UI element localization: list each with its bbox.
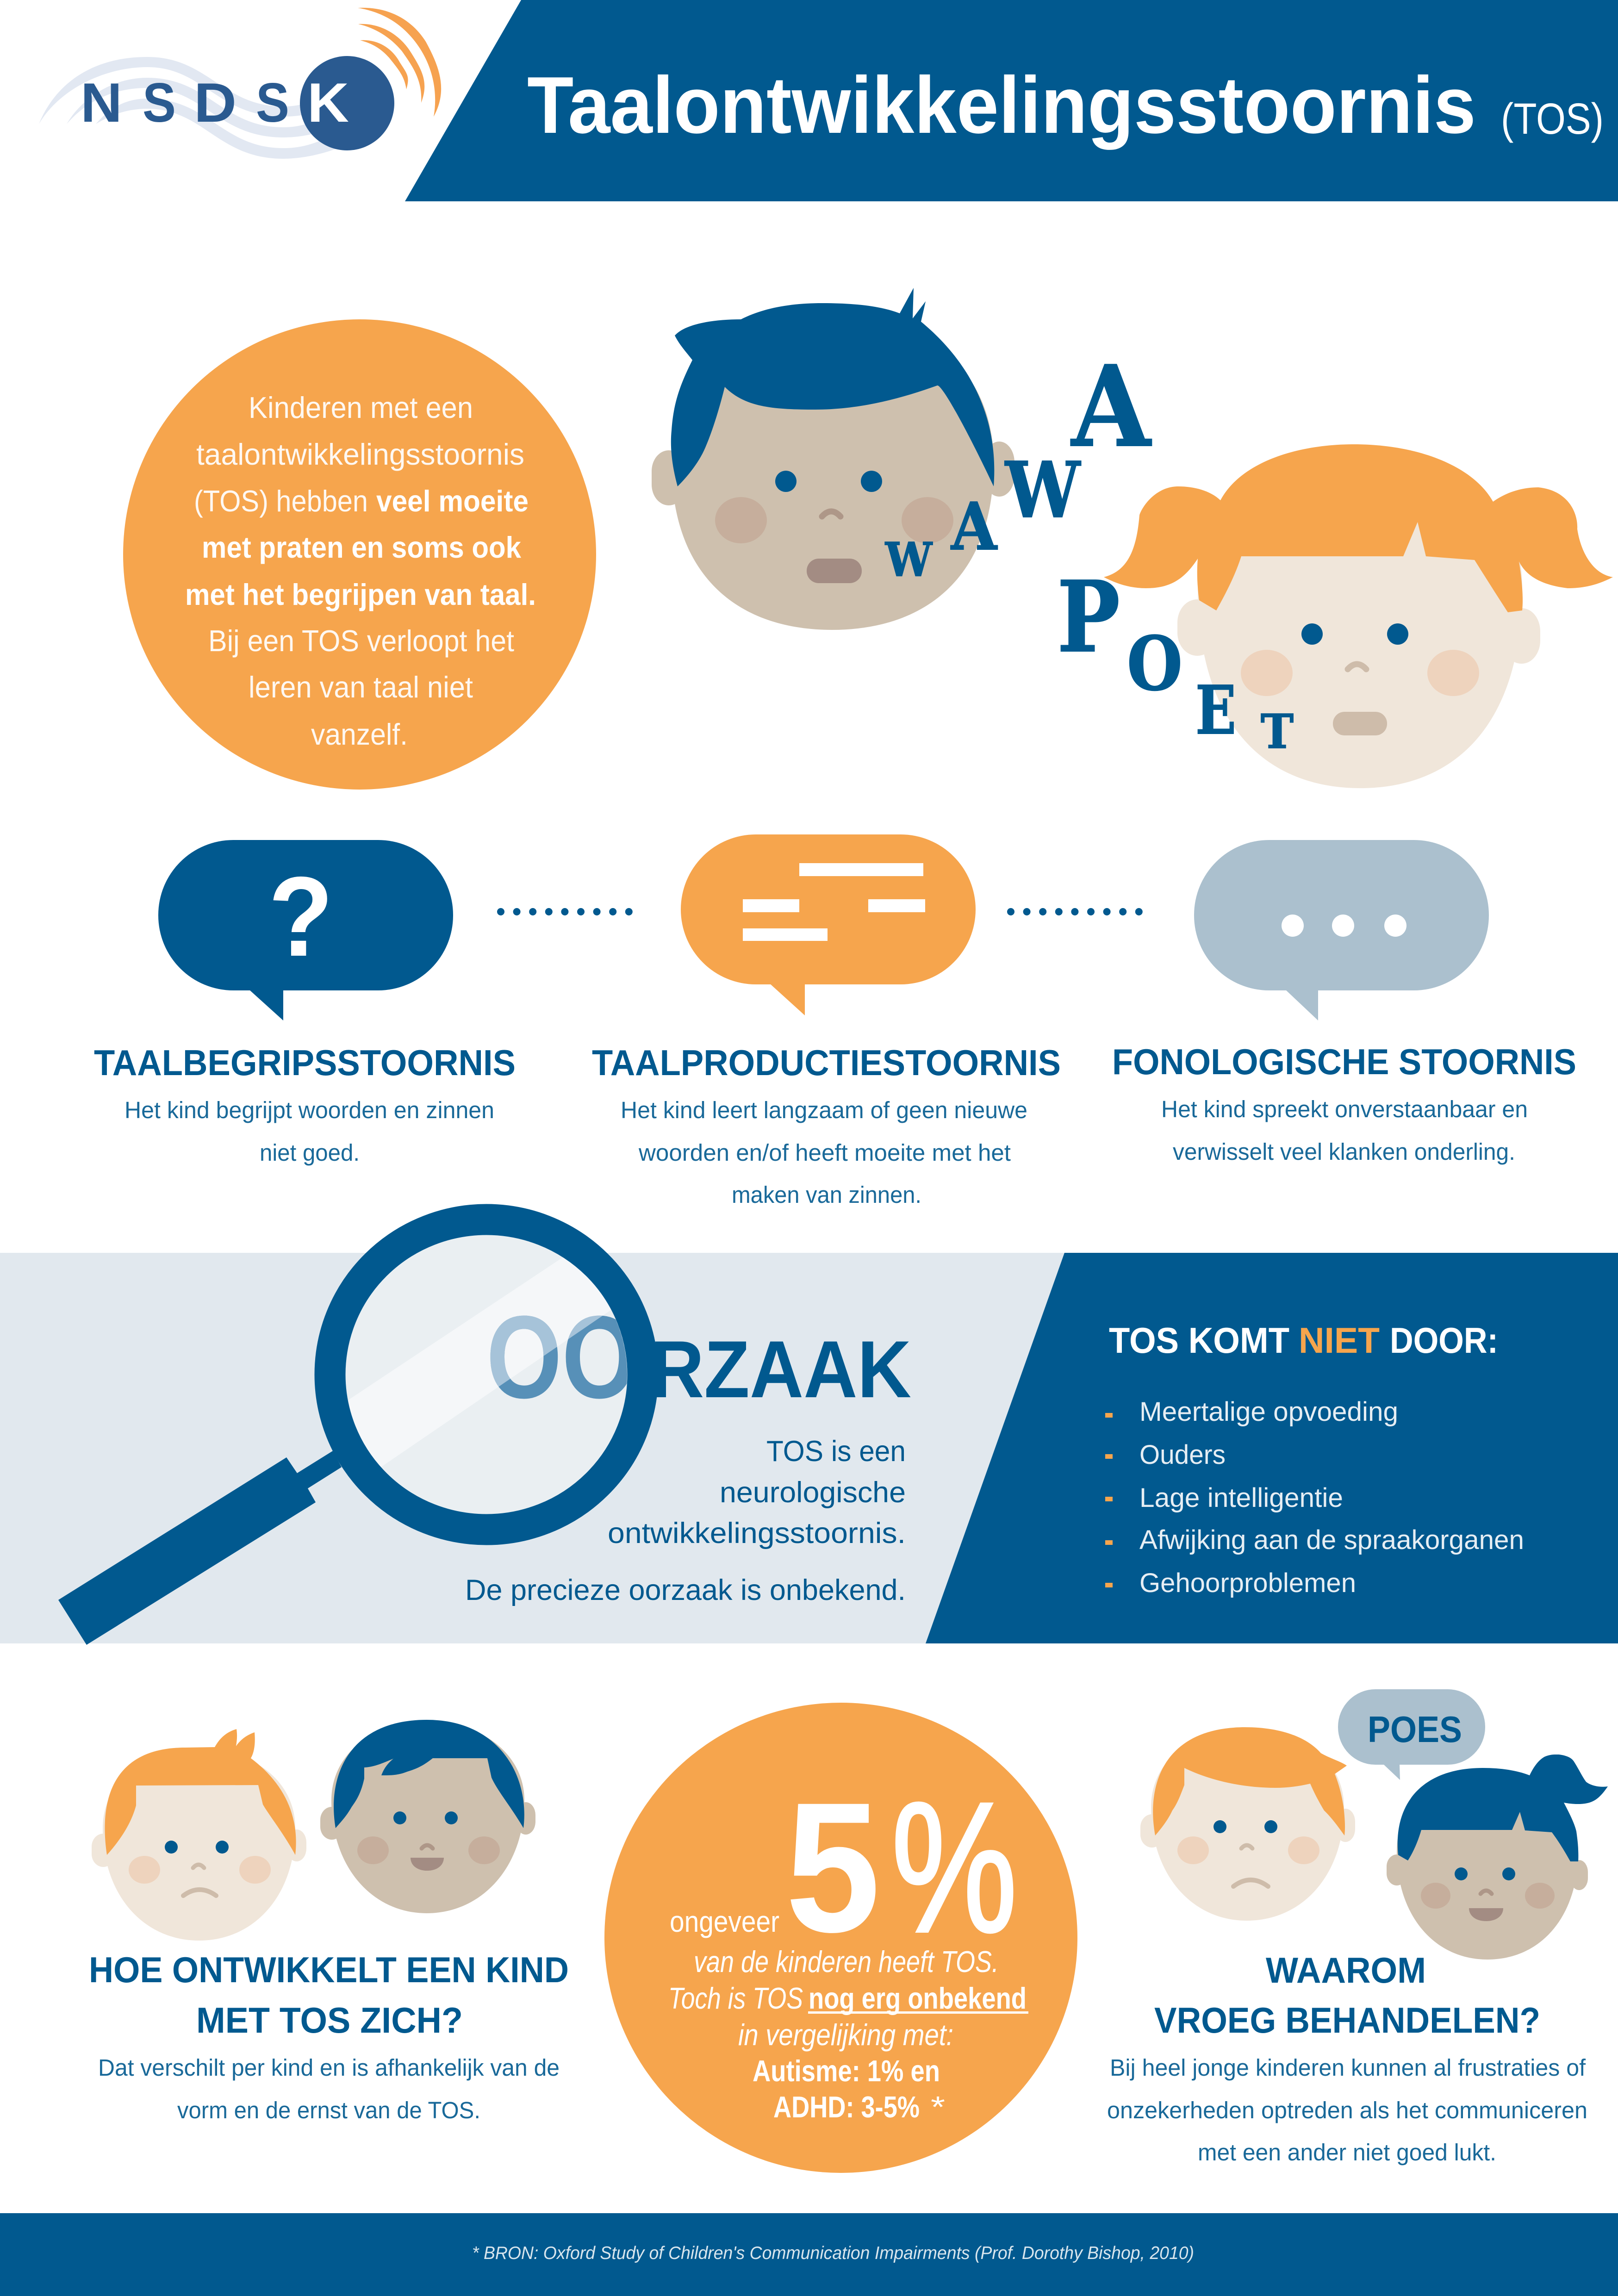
letters: AWAW — [885, 341, 1152, 587]
text: oorzaak explanation: neurologische — [720, 1476, 906, 1509]
text block: hoe ontwikkelt — [89, 1949, 569, 2123]
stat text: in vergelijking met: — [738, 2018, 953, 2052]
panel: oorzaak background — [0, 1253, 1111, 1643]
text block: hoe ontwikkelt: MET TOS ZICH? — [196, 2000, 463, 2041]
intro text: veel moeite — [376, 484, 529, 518]
text block: taalproductiestoornis — [592, 1042, 1061, 1208]
speech bubble: text lines — [681, 834, 976, 1015]
logo letters: K — [307, 72, 349, 134]
text block: taalproductiestoornis: maken van zinnen. — [732, 1182, 921, 1208]
list: not caused by: Afwijking aan de spraakorganen — [1139, 1525, 1524, 1555]
logo sound arcs — [358, 8, 441, 117]
panel: 5 percent circle — [604, 1703, 1077, 2173]
text block: waarom vroeg behandelen: WAAROM — [1266, 1950, 1426, 1991]
text block: taalproductiestoornis: TAALPRODUCTIESTOORNIS — [592, 1042, 1061, 1083]
speech bubble: ellipsis — [1194, 840, 1489, 1020]
speech bubble: POES — [1338, 1689, 1485, 1780]
list: not caused by: Gehoorproblemen — [1139, 1568, 1356, 1598]
list: not caused by: Lage intelligentie — [1139, 1483, 1343, 1513]
letters: POET: P — [1057, 560, 1120, 674]
heading: TOS komt niet door: NIET — [1299, 1320, 1380, 1361]
intro text: leren van taal niet — [249, 670, 473, 704]
illustration: happy blue-haired boy — [320, 1720, 535, 1913]
letters: POET: O — [1127, 620, 1182, 707]
letters: POET — [1057, 560, 1294, 759]
stat: 5% — [670, 1764, 1017, 1971]
text: oorzaak explanation — [465, 1435, 906, 1606]
text block: waarom vroeg behandelen: met een ander niet goed lukt. — [1198, 2139, 1496, 2165]
text: oorzaak explanation: De precieze oorzaak is onbekend. — [465, 1574, 906, 1606]
logo letters: S — [256, 72, 289, 134]
intro text: met het begrijpen van taal. — [185, 578, 536, 611]
logo letters: S — [143, 72, 176, 134]
list: not caused by: Meertalige opvoeding — [1139, 1397, 1398, 1427]
illustration: boy with blue hair — [652, 288, 1014, 630]
list: not caused by — [1105, 1397, 1524, 1598]
heading: oorzaak: OO — [486, 1291, 637, 1423]
heading: oorzaak — [486, 1291, 911, 1423]
intro text: met praten en soms ook — [202, 530, 522, 564]
speech bubble: POES: POES — [1368, 1709, 1462, 1750]
logo circle — [300, 56, 394, 150]
stat text: ADHD: 3-5% — [773, 2090, 920, 2124]
logo letters: N — [81, 72, 122, 134]
stat text: van de kinderen heeft TOS. — [694, 1945, 999, 1979]
letters: AWAW: W — [1004, 445, 1081, 535]
text block: waarom vroeg behandelen: Bij heel jonge kinderen kunnen al frustraties of — [1110, 2054, 1586, 2081]
text block: fonologische stoornis — [1112, 1041, 1576, 1165]
stat text: Autisme: 1% en — [753, 2054, 940, 2088]
logo letters: D — [194, 72, 236, 134]
text block: fonologische stoornis: Het kind spreekt onverstaanbaar en — [1161, 1096, 1528, 1122]
intro text: Bij een TOS verloopt het — [208, 624, 514, 658]
intro text: Kinderen met een — [249, 391, 473, 424]
logo waves — [39, 57, 336, 159]
list: not caused by: Ouders — [1139, 1440, 1226, 1470]
text block: taalproductiestoornis: Het kind leert langzaam of geen nieuwe — [621, 1097, 1027, 1123]
stat text — [668, 1945, 1028, 2124]
stat text: Toch is TOS — [668, 1981, 803, 2015]
letters: AWAW: A — [1070, 341, 1152, 472]
text block: waarom vroeg behandelen: onzekerheden optreden als het communiceren — [1107, 2097, 1587, 2123]
footer band — [0, 2213, 1618, 2296]
title: Taalontwikkelingsstoornis — [527, 60, 1476, 150]
intro text — [185, 391, 536, 751]
stat text: nog erg onbekend — [809, 1981, 1027, 2015]
text: oorzaak explanation: ontwikkelingsstoornis. — [608, 1517, 906, 1549]
logo: NSDSK — [39, 8, 441, 159]
text block: fonologische stoornis: verwisselt veel klanken onderling. — [1173, 1139, 1515, 1165]
heading: oorzaak: OO — [486, 1291, 637, 1423]
text block: fonologische stoornis: FONOLOGISCHE STOORNIS — [1112, 1041, 1576, 1082]
logo letters — [81, 72, 349, 134]
letters: POET: E — [1195, 671, 1236, 749]
letters: AWAW: A — [950, 489, 997, 565]
heading: TOS komt niet door: TOS KOMT — [1109, 1320, 1289, 1361]
stat: 5%: % — [891, 1764, 1017, 1971]
letters: AWAW: W — [885, 532, 933, 587]
intro text: (TOS) hebben — [194, 484, 368, 518]
magnifier lens — [346, 1235, 627, 1514]
text block: taalbegripsstoornis: TAALBEGRIPSSTOORNIS — [94, 1042, 516, 1083]
footer source: * BRON: Oxford Study of Children's Communication Impairments (Prof. Dorothy Bishop, 2010) — [472, 2243, 1194, 2263]
text block: waarom vroeg behandelen: VROEG BEHANDELEN? — [1154, 2000, 1540, 2041]
speech bubble: question mark: ? — [268, 853, 333, 980]
text block: taalbegripsstoornis — [94, 1042, 516, 1166]
illustration: happy blue-haired girl — [1387, 1755, 1608, 1960]
dotted connector left — [501, 908, 630, 915]
stat: 5%: 5 — [785, 1764, 880, 1971]
stat: 5%: ongeveer — [670, 1905, 779, 1938]
text block: hoe ontwikkelt: Dat verschilt per kind en is afhankelijk van de — [98, 2054, 560, 2081]
illustration: sad orange-haired boy — [92, 1729, 306, 1941]
illustration: girl with orange pigtails — [1104, 444, 1613, 788]
dotted connector right — [1011, 908, 1140, 915]
text block: taalproductiestoornis: woorden en/of heeft moeite met het — [638, 1139, 1011, 1166]
text block: taalbegripsstoornis: niet goed. — [260, 1139, 360, 1166]
magnifier ring and handle — [58, 1220, 643, 1645]
speech bubble: question mark — [158, 840, 453, 1020]
heading: TOS komt niet door — [1109, 1320, 1498, 1361]
illustration: sad orange-haired boy right — [1140, 1727, 1355, 1921]
heading: oorzaak: RZAAK — [650, 1325, 911, 1415]
text block: waarom vroeg behandelen — [1107, 1950, 1587, 2165]
header banner — [405, 0, 1618, 201]
letters: POET: T — [1261, 704, 1294, 759]
panel: intro circle — [123, 319, 596, 790]
intro text: vanzelf. — [311, 717, 408, 751]
stat text: * — [931, 2090, 945, 2124]
text block: taalbegripsstoornis: Het kind begrijpt woorden en zinnen — [124, 1097, 494, 1123]
heading: TOS komt niet door: DOOR: — [1390, 1320, 1498, 1361]
title abbreviation: (TOS) — [1501, 94, 1604, 143]
text block: hoe ontwikkelt: HOE ONTWIKKELT EEN KIND — [89, 1949, 569, 1990]
text: oorzaak explanation: TOS is een — [766, 1435, 906, 1468]
text block: hoe ontwikkelt: vorm en de ernst van de TOS. — [177, 2097, 480, 2123]
panel: TOS komt niet door background — [926, 1253, 1618, 1643]
intro text: taalontwikkelingsstoornis — [196, 437, 524, 471]
